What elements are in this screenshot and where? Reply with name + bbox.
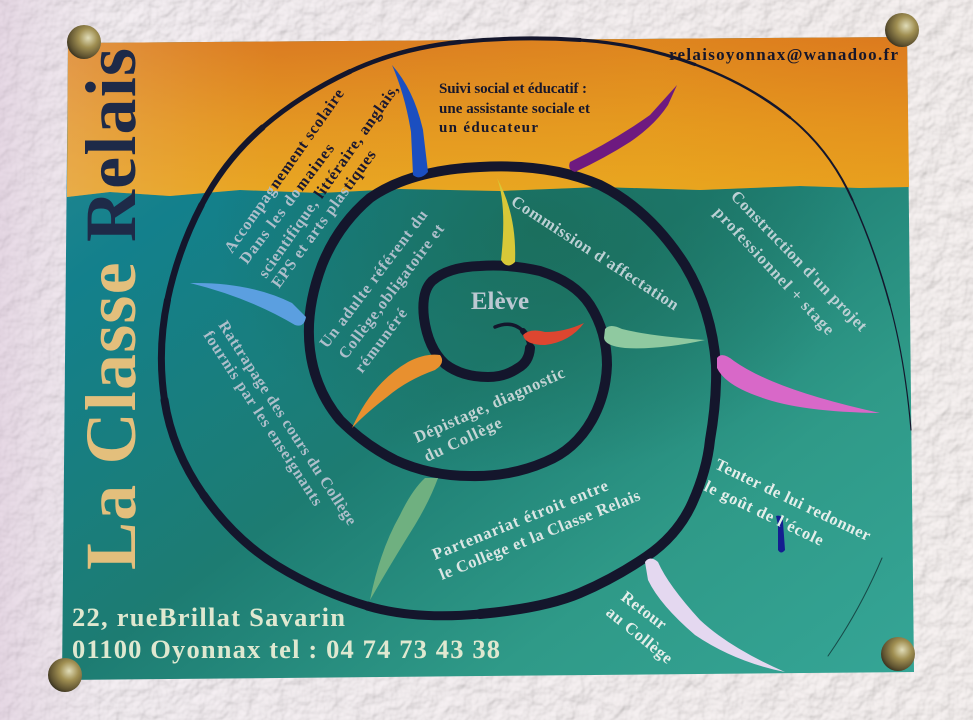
text: tenter de redonner: Tenter de lui redonner	[712, 454, 874, 545]
text: retour au collège: au Collège	[602, 602, 677, 667]
text: accompagnement scolaire: Accompagnement scolaire	[221, 86, 348, 256]
stroke: blue	[392, 65, 428, 177]
text: accompagnement scolaire: scientifique, littéraire, anglais,	[255, 82, 402, 281]
address and phone	[72, 602, 500, 664]
stroke: lavender	[645, 558, 785, 672]
stroke: pale green	[604, 326, 705, 348]
text: suivi social: Suivi social et éducatif :	[439, 81, 587, 97]
stroke: purple	[569, 85, 677, 172]
stroke: navy	[776, 516, 785, 552]
text: partenariat: le Collège et la Classe Relais	[436, 485, 643, 584]
stroke: red	[523, 323, 584, 345]
spiral line	[161, 38, 911, 656]
coloured brush strokes	[190, 65, 880, 672]
text: retour au collège: Retour	[618, 587, 671, 633]
stroke: orange	[352, 355, 442, 428]
title: La Classe Relais: La Classe Relais	[71, 48, 151, 570]
address and phone: 01100 Oyonnax tel : 04 74 73 43 38	[72, 634, 500, 664]
stroke: pink	[717, 355, 880, 413]
text: un adulte référent: rémunéré	[352, 305, 411, 376]
text: un adulte référent: Un adulte référent du	[317, 207, 431, 351]
text: dépistage: Dépistage, diagnostic	[411, 363, 568, 447]
text: un adulte référent: Collège,obligatoire et	[336, 221, 448, 362]
text: construction projet: professionnel + stage	[710, 203, 839, 339]
stroke: light blue	[190, 283, 306, 326]
text: suivi social	[439, 81, 590, 136]
text: commission: Commission d'affectation	[508, 191, 683, 314]
stroke: yellow	[497, 178, 515, 266]
text: accompagnement scolaire: Dans les domaines	[237, 141, 338, 267]
text: rattrapage: Rattrapage des cours du Collège	[215, 318, 360, 528]
text: tenter de redonner: le goût de l'école	[701, 476, 827, 550]
label: Elève: Elève	[471, 288, 529, 315]
text: accompagnement scolaire: EPS et arts plastiques	[268, 147, 380, 291]
text: suivi social: un éducateur	[439, 120, 538, 136]
text: construction projet: Construction d'un projet	[727, 187, 872, 335]
poster background	[62, 37, 914, 680]
address and phone: 22, rueBrillat Savarin	[72, 602, 345, 632]
email address: relaisoyonnax@wanadoo.fr	[669, 45, 898, 64]
text: dépistage: du Collège	[421, 413, 505, 466]
text: partenariat: Partenariat étroit entre	[429, 476, 611, 564]
text: suivi social: une assistante sociale et	[439, 101, 590, 117]
text: rattrapage: fournis par les enseignants	[200, 328, 326, 509]
stroke: green	[370, 478, 438, 600]
